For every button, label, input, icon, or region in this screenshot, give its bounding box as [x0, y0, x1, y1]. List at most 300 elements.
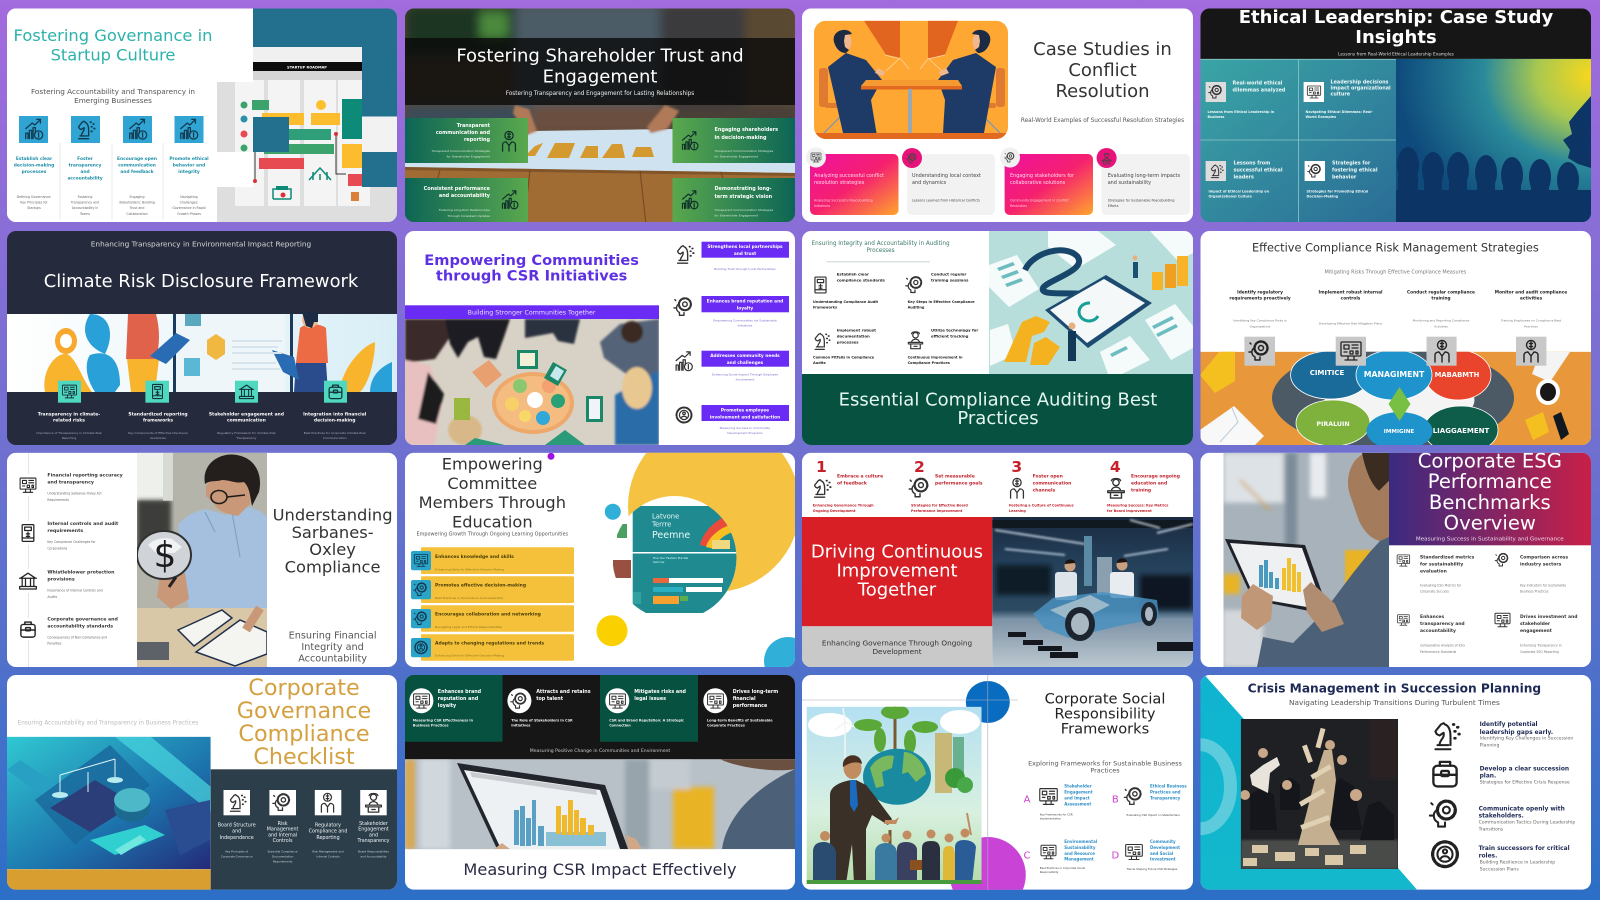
cards	[810, 154, 1190, 215]
yellow bars	[421, 547, 574, 661]
item headings: and transparency	[47, 480, 94, 486]
checklist labels: Controls	[273, 838, 293, 844]
box headings: and accountability	[439, 193, 491, 199]
checklist labels: Reporting	[316, 835, 340, 841]
item notes: Decision-Making	[1306, 195, 1339, 199]
title: Ethical Leadership: Case Study	[1239, 7, 1554, 28]
item headings: Transparency in climate-	[38, 411, 100, 417]
subtitle: Mitigating Risks Through Effective Compliance Measures	[1325, 269, 1467, 275]
box headings: Demonstrating long-	[714, 186, 772, 192]
panel: Fostering Governance in Startup Culture	[7, 8, 397, 222]
item notes: Lessons from Ethical Leadership in	[1208, 110, 1275, 114]
label notes: Development Programs	[727, 431, 763, 435]
photo: tablet analytics in factory	[1223, 453, 1389, 667]
item headings	[1232, 79, 1391, 180]
item headings: Mitigates risks and	[634, 689, 687, 695]
framework icons	[1040, 788, 1142, 860]
item icons	[1430, 723, 1459, 867]
checklist notes	[221, 850, 389, 864]
item headings: transparency and	[1420, 621, 1465, 627]
title: Compliance	[238, 721, 370, 747]
item notes: Impact of Ethical Leadership on	[1208, 190, 1270, 194]
framework headings: Engagement	[1064, 790, 1093, 795]
step numbers: 3	[1011, 458, 1022, 476]
label notes	[712, 267, 778, 435]
framework letters: B	[1112, 794, 1119, 805]
governance notes: Navigating	[180, 195, 198, 199]
title: Practices	[957, 408, 1039, 429]
card badges	[806, 148, 1117, 168]
item headings: Enhances	[1420, 614, 1444, 620]
framework headings	[1064, 784, 1187, 862]
item headings: Whistleblower protection	[47, 570, 114, 576]
card notes: Resolution	[1010, 204, 1027, 208]
step icons	[815, 478, 1124, 498]
checklist labels: Stakeholder	[359, 821, 388, 827]
item headings: Corporate governance and	[47, 616, 118, 622]
title band	[802, 374, 1193, 445]
tile icons	[1249, 340, 1538, 362]
step headings: performance goals	[935, 480, 983, 486]
item headings: frameworks	[143, 417, 173, 423]
item headings: loyalty	[438, 703, 457, 709]
checklist labels: Compliance and	[309, 829, 347, 835]
step headings	[837, 473, 1180, 493]
step numbers: 1	[816, 458, 827, 476]
item headings: reputation and	[438, 696, 479, 702]
item notes	[1478, 735, 1575, 872]
governance steps: integrity	[178, 169, 200, 175]
step numbers	[816, 458, 1121, 476]
step notes: Performance Improvement	[911, 509, 963, 513]
item notes: Communication Tactics During Leadership	[1479, 819, 1575, 825]
governance steps: accountability	[67, 176, 103, 182]
item headings: communication	[227, 417, 266, 423]
item headings: legal issues	[634, 696, 666, 702]
strategy notes: Monitoring and Reporting Compliance	[1413, 319, 1470, 323]
title: Fostering Shareholder Trust and	[456, 46, 744, 67]
checklist labels: Management	[267, 827, 299, 833]
item headings: Train successors for critical	[1479, 846, 1570, 852]
item headings	[1420, 554, 1577, 634]
card text: and sustainability	[1108, 180, 1151, 186]
item headings: training sessions	[931, 278, 969, 283]
panel: Driving Continuous Improvement	[802, 453, 1193, 667]
photo: hands over report	[405, 5, 797, 225]
item headings: Strategies for	[1332, 160, 1371, 166]
framework headings: Sustainability	[1064, 845, 1096, 850]
panel: Corporate ESG Performance	[1200, 449, 1591, 667]
strategy headings: activities	[1520, 296, 1543, 302]
title: Corporate	[248, 675, 360, 701]
step headings: Set measurable	[935, 473, 975, 479]
purple labels	[702, 242, 789, 421]
item headings: performance	[733, 703, 768, 709]
item notes: Understanding Compliance Audit	[813, 300, 878, 304]
title: Crisis Management in Succession Planning	[1248, 682, 1541, 696]
item notes: Transparency	[235, 436, 257, 440]
icon tiles	[19, 116, 204, 143]
item tiles	[1206, 82, 1325, 181]
panel: Climate Risk Disclosure Framework	[7, 231, 397, 445]
item headings: fostering ethical	[1332, 167, 1378, 173]
item headings: stakeholders.	[1479, 814, 1524, 820]
tile icons	[414, 554, 428, 654]
framework notes: Evaluating CSR Impact on Stakeholders	[1126, 813, 1180, 817]
strategy notes: Practices	[1524, 325, 1538, 329]
item headings: roles.	[1479, 853, 1497, 859]
label text: and trust	[734, 251, 756, 257]
subtitle: Accountability	[298, 654, 367, 665]
title: Measuring CSR Impact Effectively	[463, 860, 737, 879]
checklist labels: Engagement	[358, 827, 389, 833]
item notes: Key Components of Effective Disclosure	[128, 431, 188, 435]
item headings: decision-making	[314, 417, 355, 423]
item headings: Drives long-term	[733, 689, 778, 695]
subtitle: Navigating Leadership Transitions During Turbulent Times	[1289, 698, 1500, 707]
item notes: Enhancing Transparency in	[1520, 644, 1562, 648]
box headings: term strategic vision	[714, 194, 773, 200]
panel: Case Studies in Conflict Resolution	[802, 8, 1193, 222]
desk image: management diagram: LIAGGAEMENT	[1433, 427, 1489, 435]
item notes: Initiatives	[511, 724, 530, 728]
card text: resolution strategies	[814, 180, 865, 186]
item notes: Consequences of Non-Compliance and	[47, 635, 107, 639]
framework notes: Key Frameworks for CSR	[1040, 812, 1073, 816]
framework headings: Management	[1064, 857, 1094, 862]
panel: Empowering Communities through CSR	[405, 231, 795, 445]
strategy notes	[1233, 319, 1562, 329]
item notes: Best Practices for Corporate Climate Risk	[304, 431, 366, 435]
governance steps: decision-making	[14, 162, 54, 168]
item headings: accountability standards	[47, 623, 113, 629]
item notes: Importance of Transparency in Climate Risk	[36, 431, 102, 435]
framework headings: Assessment	[1064, 801, 1091, 806]
governance steps: Foster	[77, 156, 94, 162]
checklist labels: Independence	[220, 835, 254, 841]
title: Compliance	[285, 557, 381, 576]
step headings: Encourage ongoing	[1131, 473, 1180, 479]
item headings: Stakeholder engagement and	[209, 411, 284, 417]
item notes: Reporting	[62, 436, 76, 440]
governance notes: Growth Phases	[177, 212, 201, 216]
title: Education	[452, 512, 533, 531]
item headings: Internal controls and audit	[47, 521, 119, 527]
item notes: Compliance Practices	[908, 361, 950, 365]
item headings: for sustainability	[1420, 561, 1463, 567]
governance steps: and feedback	[120, 169, 154, 175]
strategy notes: Training Employees on Compliance Best	[1500, 319, 1562, 323]
step headings: communication	[1033, 480, 1071, 486]
item notes: Corporate Success	[1420, 590, 1449, 594]
subtitle: Development	[872, 647, 922, 656]
governance notes	[17, 195, 206, 216]
icon circles	[409, 688, 727, 713]
title: Committee	[447, 474, 537, 493]
checklist labels: and	[369, 832, 378, 838]
photo: falling block tower	[1240, 719, 1398, 869]
gold bar	[7, 869, 211, 890]
subtitle: Building Stronger Communities Together	[468, 309, 596, 316]
subtitle: Fostering Accountability and Transparency in	[31, 87, 195, 96]
photo: analyst with magnifier: $	[154, 535, 176, 576]
framework headings: and Resource	[1064, 851, 1095, 856]
framework headings: Stakeholder	[1064, 784, 1092, 789]
card text: Understanding local context	[912, 173, 981, 179]
item headings: requirements	[47, 528, 83, 534]
photo: engineers with chassis	[992, 517, 1193, 667]
step headings: Foster open	[1033, 473, 1063, 479]
desk image: management diagram: PIRALUIN	[1316, 421, 1350, 428]
item headings: Standardized metrics	[1420, 554, 1475, 560]
framework letters: C	[1024, 850, 1031, 861]
checklist notes: Corporate Governance	[221, 855, 253, 859]
illustration: reporting figures	[7, 312, 397, 392]
item notes: Connection	[609, 724, 631, 728]
step notes: Fostering a Culture of Continuous	[1009, 503, 1074, 507]
governance notes: Stakeholders: Building	[119, 201, 155, 205]
desk image: management diagram: MABABMTH	[1435, 371, 1480, 379]
title: Governance	[237, 698, 371, 724]
strategy headings: requirements proactively	[1229, 296, 1291, 302]
item headings: Enhances brand	[438, 689, 482, 695]
governance notes: Challenges:	[180, 201, 198, 205]
item headings: financial	[733, 696, 756, 702]
checklist notes: Board Responsibilities	[358, 850, 389, 854]
round brochure image: Terrre	[651, 521, 671, 529]
item headings: Comparison across	[1520, 554, 1568, 560]
title: Frameworks	[1061, 720, 1149, 737]
title: Oxley	[309, 540, 356, 559]
circle icons	[414, 693, 723, 708]
title: Essential Compliance Auditing Best	[839, 390, 1157, 411]
step headings: channels	[1033, 487, 1056, 493]
title: Empowering Communities	[424, 252, 639, 269]
item notes: Key Compliance Challenges for	[47, 540, 96, 544]
item notes: Communication	[323, 436, 347, 440]
item headings	[1479, 722, 1570, 859]
tile icons	[230, 793, 381, 812]
card notes: Community Engagement in Conflict	[1010, 199, 1069, 203]
step notes: Enhancing Governance Through	[813, 503, 874, 507]
strategy headings	[1229, 289, 1567, 302]
item notes: Succession Plans	[1480, 866, 1519, 872]
framework headings: Ethical Business	[1150, 784, 1187, 789]
label text: loyalty	[737, 306, 753, 312]
label notes: Initiatives	[738, 324, 753, 328]
item notes: Planning	[1480, 742, 1499, 748]
card notes: Strategies for Sustainable Peacebuilding	[1108, 199, 1174, 203]
item headings: Drives investment and	[1520, 614, 1577, 620]
governance notes: Accountability in	[72, 206, 98, 210]
panel: Measuring CSR Impact	[405, 675, 795, 890]
framework notes	[1040, 812, 1180, 874]
title: Improvement	[836, 560, 958, 581]
label notes: Measuring Success in Community	[720, 426, 771, 430]
item notes: Performance Standards	[1420, 650, 1457, 654]
item notes: Measuring CSR Effectiveness in	[413, 718, 474, 722]
framework letters: D	[1111, 850, 1119, 861]
cyan shape	[1200, 675, 1417, 890]
item notes: Strategies for Promoting Ethical	[1306, 190, 1368, 194]
panel: Corporate Social Responsibility Frameworks	[802, 675, 1193, 900]
desk image: management diagram: IMMIGINE	[1384, 429, 1414, 435]
box notes: for Shareholder Engagement	[714, 214, 759, 218]
checklist notes: Internal Controls	[316, 855, 340, 859]
framework headings: and Impact	[1064, 796, 1090, 800]
image: startup roadmap board	[217, 47, 397, 222]
item notes	[413, 718, 773, 728]
framework headings: Investment	[1150, 857, 1176, 862]
item headings: Leadership decisions	[1330, 79, 1389, 85]
strategy headings: Monitor and audit compliance	[1495, 289, 1567, 295]
desk image: management diagram: MANAGIMENT	[1364, 370, 1425, 379]
item headings: leadership gaps early.	[1480, 730, 1553, 736]
photo: tablet dashboard	[405, 759, 795, 849]
row icons	[674, 246, 694, 422]
strategy headings: Implement robust internal	[1319, 289, 1383, 295]
framework headings: Transparency	[1150, 796, 1181, 800]
desk image: management diagram	[1200, 346, 1591, 454]
item headings: culture	[1330, 91, 1351, 97]
governance notes: Teams	[79, 212, 90, 216]
label text	[707, 244, 783, 420]
item icons	[1397, 554, 1510, 627]
step notes: Ongoing Development	[813, 509, 856, 513]
eyebrow: Ensuring Integrity and Accountability in Auditing	[812, 241, 950, 247]
item notes: CSR and Brand Reputation: A Strategic	[609, 718, 684, 722]
box icons	[502, 131, 698, 209]
illustration: negotiation at table	[814, 21, 1008, 139]
governance steps: Establish clear	[16, 156, 53, 162]
blue circle	[966, 681, 1010, 723]
framework notes: Trends Shaping Future CSR Strategies	[1126, 867, 1178, 871]
title: Benchmarks	[1429, 491, 1551, 514]
bar headings: Encourages collaboration and networking	[435, 612, 541, 618]
checklist notes: and Accountability	[360, 855, 387, 859]
label text: Promotes employee	[721, 407, 769, 413]
eyebrow text: Enhancing Transparency in Environmental Impact Reporting	[91, 240, 311, 249]
step headings: education and	[1131, 480, 1167, 486]
step notes: Measuring Success: Key Metrics	[1107, 503, 1168, 507]
item headings	[38, 411, 367, 423]
item headings: Real-world ethical	[1232, 80, 1283, 86]
title: through CSR Initiatives	[436, 268, 627, 285]
item headings: Utilize technology for	[931, 328, 978, 333]
item headings	[837, 272, 978, 344]
item notes: Long-term Benefits of Sustainable	[707, 718, 773, 722]
title: Conflict	[1068, 60, 1137, 81]
item headings: top talent	[536, 696, 564, 702]
bar headings: Adapts to changing regulations and trends	[435, 640, 544, 646]
panel: Crisis Management in Succession Planning	[1170, 675, 1591, 890]
item headings: leaders	[1234, 174, 1254, 180]
item headings: Lessons from	[1234, 160, 1270, 166]
card text: Evaluating long-term impacts	[1108, 173, 1180, 179]
item headings	[438, 689, 778, 709]
governance steps: processes	[22, 169, 47, 175]
framework notes: Best Practices in Corporate Social	[1040, 866, 1085, 870]
item headings: related risks	[53, 417, 85, 423]
framework headings: Development	[1150, 845, 1180, 850]
strategy headings: Conduct regular compliance	[1407, 289, 1475, 295]
box notes: for Shareholder Engagement	[714, 154, 759, 158]
teal grid	[1200, 59, 1396, 222]
step notes	[813, 503, 1168, 513]
item notes: The Role of Stakeholders in CSR	[511, 718, 573, 722]
dividers	[60, 143, 163, 220]
label notes: Empowering Communities via Sustainable	[713, 319, 777, 323]
subtitle: Empowering Growth Through Ongoing Learning Opportunities	[417, 532, 568, 538]
governance notes: Startups	[27, 206, 41, 210]
round brochure image	[612, 496, 737, 620]
item headings: Identify potential	[1480, 722, 1538, 728]
item headings: provisions	[47, 577, 75, 583]
item headings: Communicate openly with	[1479, 806, 1565, 812]
item headings: plan.	[1480, 774, 1496, 780]
framework letters	[1024, 794, 1119, 861]
box headings: Transparent	[457, 123, 491, 129]
title: Fostering Governance in	[14, 26, 212, 45]
strategy headings: controls	[1341, 296, 1361, 302]
item notes: Requirements	[47, 498, 69, 502]
label notes: Involvement	[736, 378, 755, 382]
step numbers: 4	[1110, 458, 1121, 476]
step notes: Learning	[1009, 509, 1026, 513]
eyebrow: Processes	[867, 248, 895, 254]
side text: Ensuring Accountability and Transparency in Business Practices	[18, 721, 198, 727]
item notes: Business Practices	[1520, 590, 1549, 594]
strategy notes: Developing Effective Risk Mitigation Plans	[1319, 322, 1382, 326]
title: Corporate ESG	[1418, 449, 1562, 472]
illustration: scales of justice	[7, 737, 211, 869]
box notes: Transparent Communication Strategies	[430, 149, 490, 153]
item headings: Integration into financial	[303, 411, 367, 417]
label text: Enhances brand reputation and	[707, 298, 783, 304]
governance steps: Encourage open	[117, 156, 157, 162]
subtitle: Integrity and	[301, 642, 364, 653]
item notes: Strategies for Effective Crisis Response	[1480, 780, 1570, 786]
bar notes: Enhancing Skills for Effective Decision-Making	[435, 567, 504, 571]
green boxes	[405, 118, 795, 222]
bar headings	[435, 554, 544, 646]
item notes: Audits	[813, 361, 826, 365]
item notes: Continuous Improvement in	[908, 356, 963, 360]
item notes: Comparative Analysis of ESG	[1420, 644, 1465, 648]
item notes: Evaluating ESG Metrics for	[1420, 583, 1462, 587]
item notes: Regulatory Framework for Climate Risk	[217, 431, 276, 435]
checklist labels: and Internal	[268, 832, 297, 838]
item headings: engagement	[1520, 628, 1553, 634]
checklist notes: Documentation	[272, 855, 294, 859]
dark panel	[211, 769, 397, 890]
item notes	[47, 492, 107, 646]
title: Engagement	[543, 67, 657, 88]
card text	[814, 173, 1180, 186]
label text: Addresses community needs	[710, 353, 780, 359]
framework headings: Community	[1150, 839, 1176, 844]
label text: Strengthens local partnerships	[707, 244, 783, 250]
ring	[1170, 745, 1230, 829]
title: Responsibility	[1055, 705, 1156, 722]
strategy notes: Activities	[1434, 325, 1448, 329]
checklist labels	[218, 821, 390, 844]
item headings: behavior	[1332, 174, 1357, 180]
framework headings: and Social	[1150, 851, 1174, 856]
framework notes: Responsibility	[1040, 870, 1059, 874]
illustration: isometric audit	[989, 231, 1193, 374]
box notes: Fostering Long-Term Relationships	[439, 208, 490, 212]
